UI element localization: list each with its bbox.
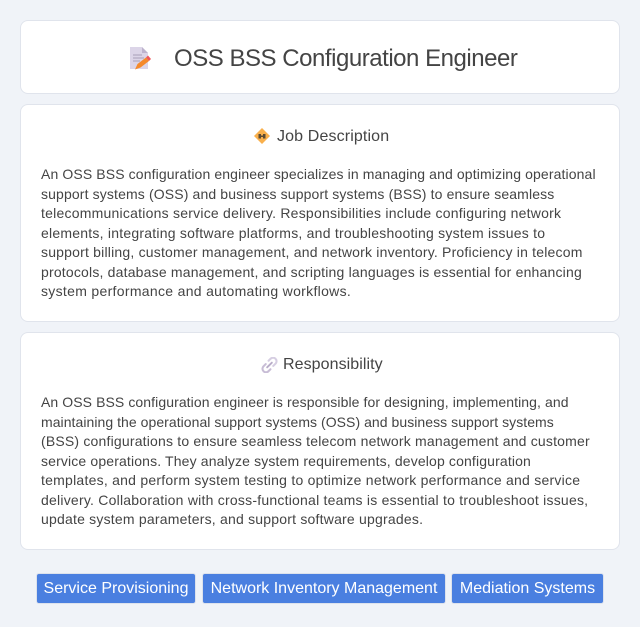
text block: responsibility: An OSS BSS configuration engineer is responsible for designing, implementing, and xyxy=(41,394,569,410)
text block: responsibility: templates, and perform system testing to optimize network performance and service xyxy=(41,472,580,488)
icon: job description diamond xyxy=(254,128,270,144)
tag: mediation systems xyxy=(452,574,603,603)
heading: responsibility: Responsibility xyxy=(283,356,383,373)
text block: job description: system performance and automating workflows. xyxy=(41,283,351,299)
text block: job description: support systems (OSS) and business support systems (BSS) to ensure seamless xyxy=(41,186,554,202)
text block: job description: telecommunications service delivery. Responsibilities include configuring network xyxy=(41,205,561,221)
icon: document with pencil xyxy=(130,47,151,70)
panel: job description xyxy=(20,104,620,322)
text block: job description: protocols, database management, and scripting languages is essential for enhancing xyxy=(41,264,582,280)
text block: responsibility: service operations. They analyze system requirements, develop configuration xyxy=(41,452,531,468)
tag: mediation systems: Mediation Systems xyxy=(460,580,595,597)
text block: responsibility: delivery. Collaboration with cross-functional teams is essential to troubleshoot issues, xyxy=(41,492,588,508)
text block: job description: elements, integrating software platforms, and troubleshooting system issues to xyxy=(41,224,545,240)
text block: job description: support billing, customer management, and network inventory. Proficiency in telecom xyxy=(41,244,583,260)
heading: job description: Job Description xyxy=(277,128,389,145)
panel: responsibility xyxy=(20,332,620,550)
tag: network inventory management: Network Inventory Management xyxy=(211,580,437,597)
text block: responsibility: (BSS) configurations to ensure seamless telecom network management and customer xyxy=(41,433,590,449)
icon: chain link xyxy=(262,357,278,373)
text block: job description: An OSS BSS configuration engineer specializes in managing and optimizing operational xyxy=(41,166,596,182)
title text: OSS BSS Configuration Engineer xyxy=(174,45,517,72)
panel: title xyxy=(20,20,620,94)
text block: job description xyxy=(41,166,596,299)
tag: service provisioning xyxy=(37,574,195,603)
text block: responsibility: update system parameters, and support software upgrades. xyxy=(41,511,423,527)
tag: service provisioning: Service Provisioning xyxy=(44,580,188,597)
text block: responsibility xyxy=(41,394,590,527)
tag: network inventory management xyxy=(203,574,445,603)
text block: responsibility: maintaining the operational support systems (OSS) and business support systems xyxy=(41,414,554,430)
